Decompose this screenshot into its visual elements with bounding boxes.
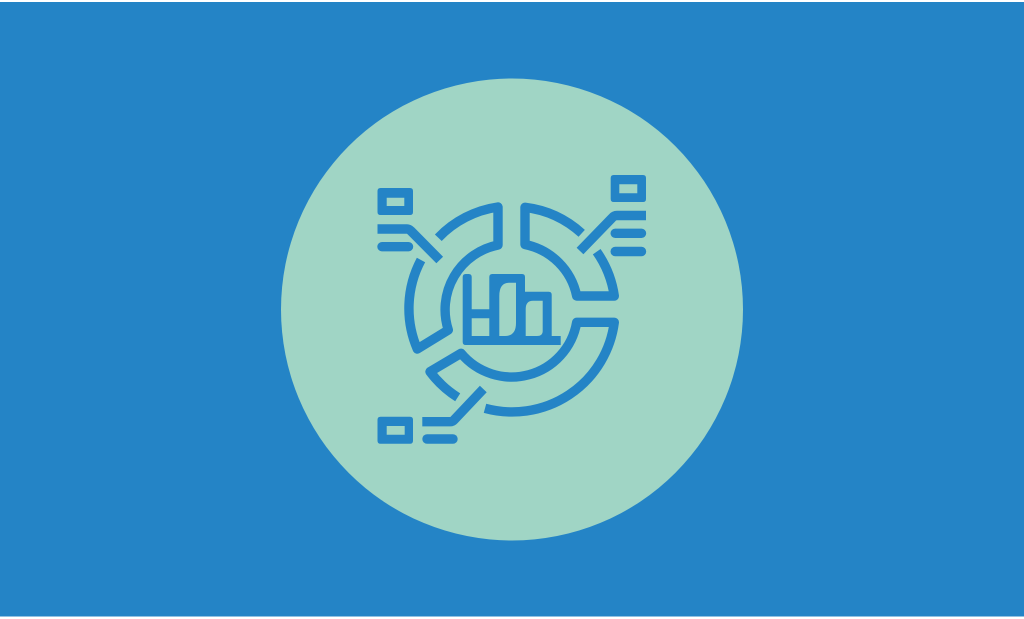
icon: top-left pie segment xyxy=(409,207,498,349)
icon: central bar chart xyxy=(463,274,561,345)
icon: top-right data label xyxy=(580,175,646,252)
icon: data analytics xyxy=(378,175,646,444)
icon: top-left data label xyxy=(378,188,440,260)
mint circle xyxy=(281,78,743,540)
icon: bottom-left data label xyxy=(378,389,483,444)
icon: bottom pie segment xyxy=(430,322,614,412)
icon: top-right pie segment xyxy=(525,207,614,296)
